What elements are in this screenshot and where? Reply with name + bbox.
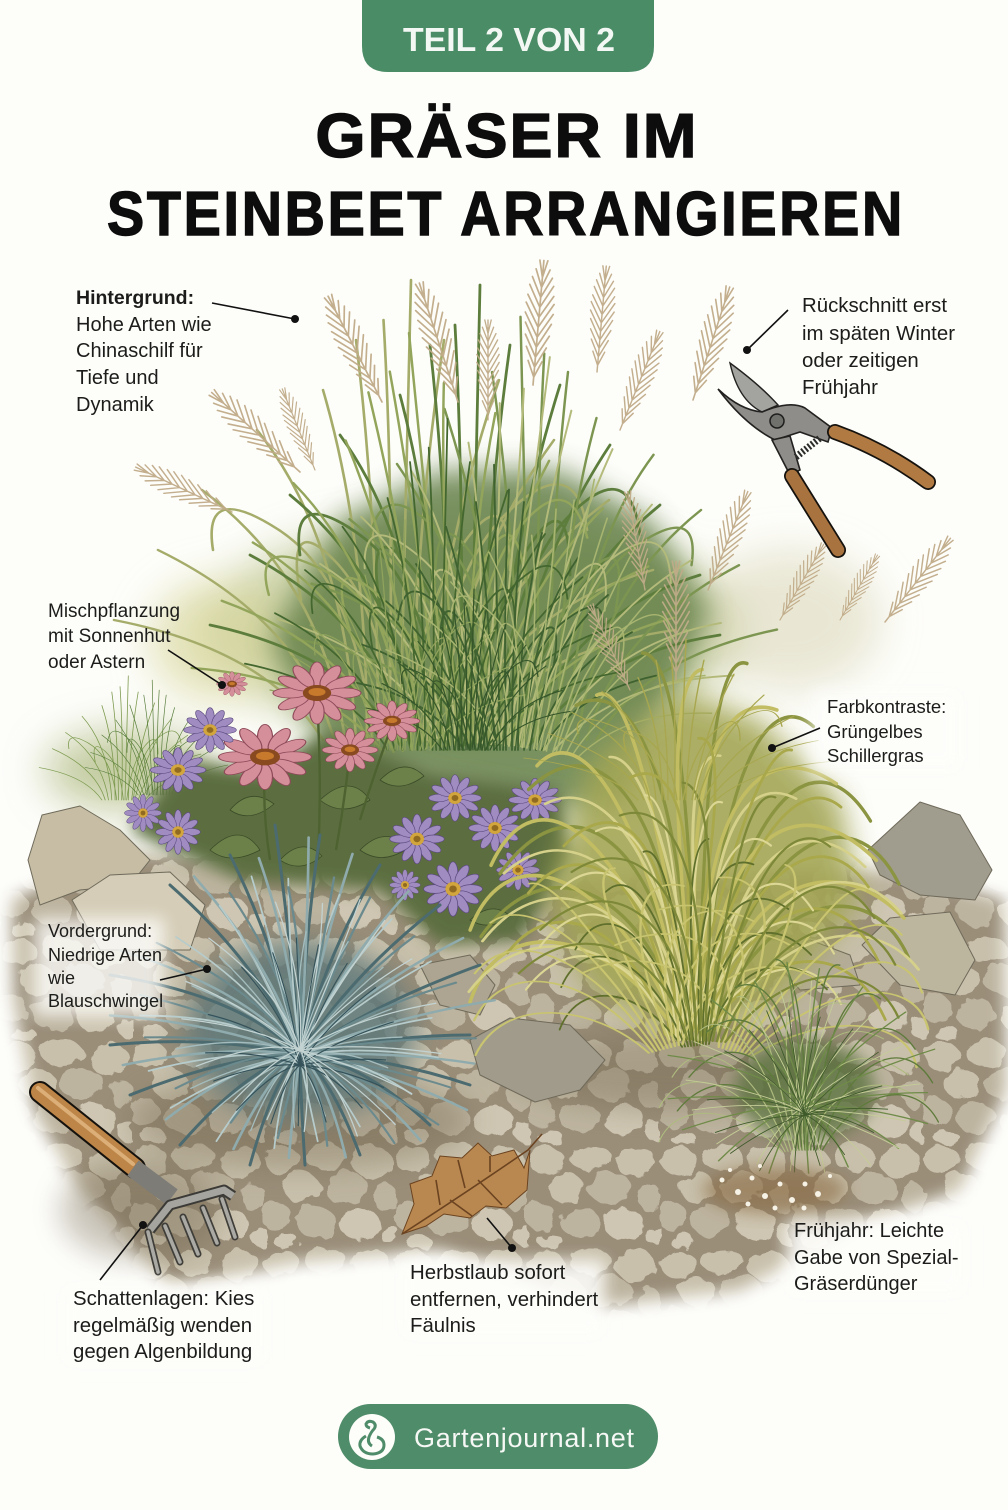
label: Schattenlagen: gegen Algenbildung bbox=[73, 1341, 252, 1363]
label: Hintergrund: Hohe Arten wie bbox=[76, 314, 212, 336]
label: Mischpflanzung: Mischpflanzung bbox=[48, 601, 180, 622]
small green grass bbox=[635, 960, 938, 1193]
label: Vordergrund: Blauschwingel bbox=[48, 991, 163, 1011]
icon: logo bbox=[349, 1414, 395, 1460]
label: Hintergrund: Hintergrund: bbox=[76, 287, 194, 309]
title bbox=[107, 102, 905, 249]
footer badge: Gartenjournal.net bbox=[414, 1423, 634, 1453]
label: Herbstlaub: entfernen, verhindert bbox=[410, 1289, 599, 1311]
header tab bbox=[362, 0, 654, 72]
gravel ground bbox=[0, 820, 1008, 1340]
label: Frühjahr: Frühjahr: Leichte bbox=[794, 1220, 944, 1242]
title: STEINBEET ARRANGIEREN bbox=[107, 180, 905, 249]
gravel shading bbox=[60, 1030, 850, 1260]
left low grass bbox=[39, 676, 228, 800]
plumes bbox=[131, 259, 960, 694]
footer badge bbox=[338, 1404, 658, 1469]
label: Vordergrund: wie bbox=[47, 968, 75, 988]
label: Vordergrund bbox=[34, 918, 211, 1016]
label: Hintergrund: Dynamik bbox=[76, 394, 155, 416]
label: Rückschnitt: oder zeitigen bbox=[802, 350, 919, 372]
label: Herbstlaub bbox=[400, 1218, 605, 1338]
label: Vordergrund: Niedrige Arten bbox=[48, 945, 162, 965]
label: Farbkontraste: Farbkontraste: bbox=[827, 696, 946, 717]
label: Hintergrund: Tiefe und bbox=[76, 367, 159, 389]
label: Rückschnitt: im späten Winter bbox=[802, 323, 955, 345]
label: Herbstlaub: Fäulnis bbox=[410, 1315, 476, 1337]
flowers: Sonnenhut bbox=[216, 662, 420, 790]
label: Frühjahr bbox=[786, 1220, 966, 1296]
yellow grass: Schillergras bbox=[402, 639, 996, 1093]
label: Hintergrund bbox=[76, 287, 299, 416]
icon: rake bbox=[38, 1088, 235, 1272]
background haze bbox=[45, 520, 880, 810]
label: Frühjahr: Gabe von Spezial- bbox=[794, 1247, 959, 1269]
label: Farbkontraste: Grüngelbes bbox=[827, 721, 923, 742]
label: Rückschnitt: Frühjahr bbox=[802, 377, 878, 399]
label: Rückschnitt bbox=[743, 295, 955, 399]
label: Mischpflanzung bbox=[48, 601, 226, 689]
label: Frühjahr: Gräserdünger bbox=[794, 1273, 918, 1295]
label: Hintergrund: Chinaschilf für bbox=[76, 340, 203, 362]
foliage behind flowers bbox=[130, 700, 575, 945]
icon: pruning shears bbox=[718, 363, 928, 550]
header tab: TEIL 2 VON 2 bbox=[403, 21, 615, 58]
label: Schattenlagen: Schattenlagen: Kies bbox=[73, 1288, 254, 1310]
label: Mischpflanzung: oder Astern bbox=[48, 652, 145, 673]
icon: autumn leaf bbox=[402, 1134, 542, 1234]
title: GRÄSER IM bbox=[316, 102, 698, 171]
label: Herbstlaub: Herbstlaub sofort bbox=[410, 1262, 566, 1284]
label: Farbkontraste bbox=[768, 690, 962, 772]
label: Vordergrund: Vordergrund: bbox=[48, 921, 152, 941]
label: Schattenlagen bbox=[62, 1221, 267, 1365]
rocks bbox=[28, 802, 992, 1102]
fertilizer granules bbox=[703, 1164, 847, 1214]
label: Farbkontraste: Schillergras bbox=[827, 745, 924, 766]
back grass: Chinaschilf bbox=[114, 280, 777, 810]
label: Rückschnitt: Rückschnitt erst bbox=[802, 295, 947, 317]
label: Mischpflanzung: mit Sonnenhut bbox=[48, 626, 171, 647]
illustration: garden bed bbox=[0, 259, 1008, 1340]
label: Schattenlagen: regelmäßig wenden bbox=[73, 1315, 252, 1337]
blue grass: Blauschwingel bbox=[92, 811, 515, 1187]
flowers: Astern bbox=[124, 708, 561, 916]
